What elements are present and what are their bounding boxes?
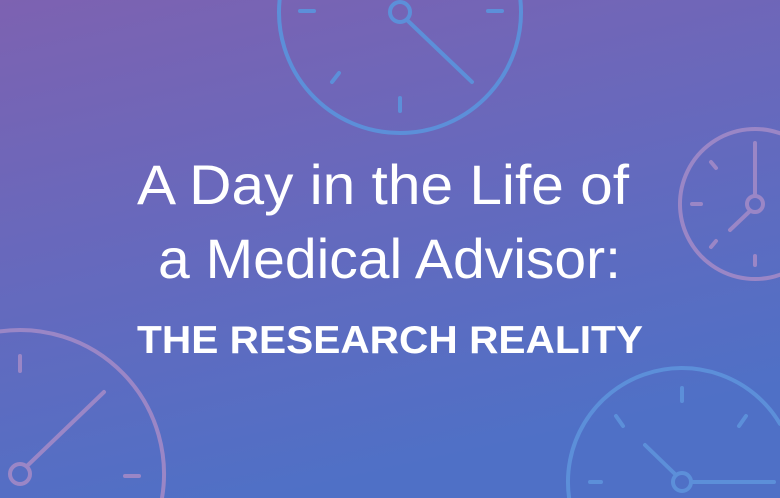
title bbox=[137, 153, 643, 362]
icon: bottom-right clock bbox=[568, 368, 780, 498]
title line 2: a Medical Advisor: bbox=[158, 227, 621, 290]
icon: bottom-left clock bbox=[0, 330, 164, 498]
title line 1: A Day in the Life of bbox=[137, 153, 629, 216]
icon: top clock bbox=[279, 0, 521, 133]
subtitle: THE RESEARCH REALITY bbox=[137, 319, 643, 362]
icon: right clock bbox=[680, 129, 780, 279]
